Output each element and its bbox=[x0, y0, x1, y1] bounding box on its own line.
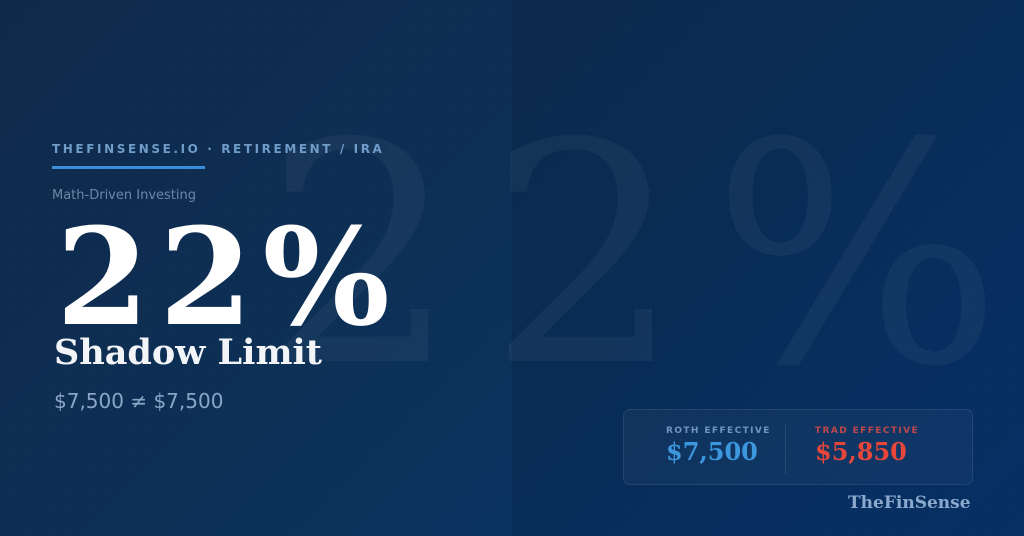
brand: TheFinSense bbox=[848, 493, 971, 513]
panel: effective amounts bbox=[623, 409, 973, 485]
roth label: ROTH EFFECTIVE bbox=[666, 426, 771, 436]
watermark: 22%: 22% bbox=[264, 78, 1024, 433]
trad label: TRAD EFFECTIVE bbox=[815, 426, 919, 436]
roth value: $7,500 bbox=[666, 437, 758, 466]
heading: Shadow Limit bbox=[54, 332, 322, 373]
accent line bbox=[52, 166, 205, 169]
kicker label: THEFINSENSE.IO · RETIREMENT / IRA bbox=[52, 142, 384, 156]
divider bbox=[785, 424, 786, 474]
trad value: $5,850 bbox=[815, 437, 907, 466]
comparison text: $7,500 ≠ $7,500 bbox=[54, 389, 223, 413]
main number: 22% bbox=[56, 198, 400, 356]
subtitle: Math-Driven Investing bbox=[52, 188, 196, 203]
